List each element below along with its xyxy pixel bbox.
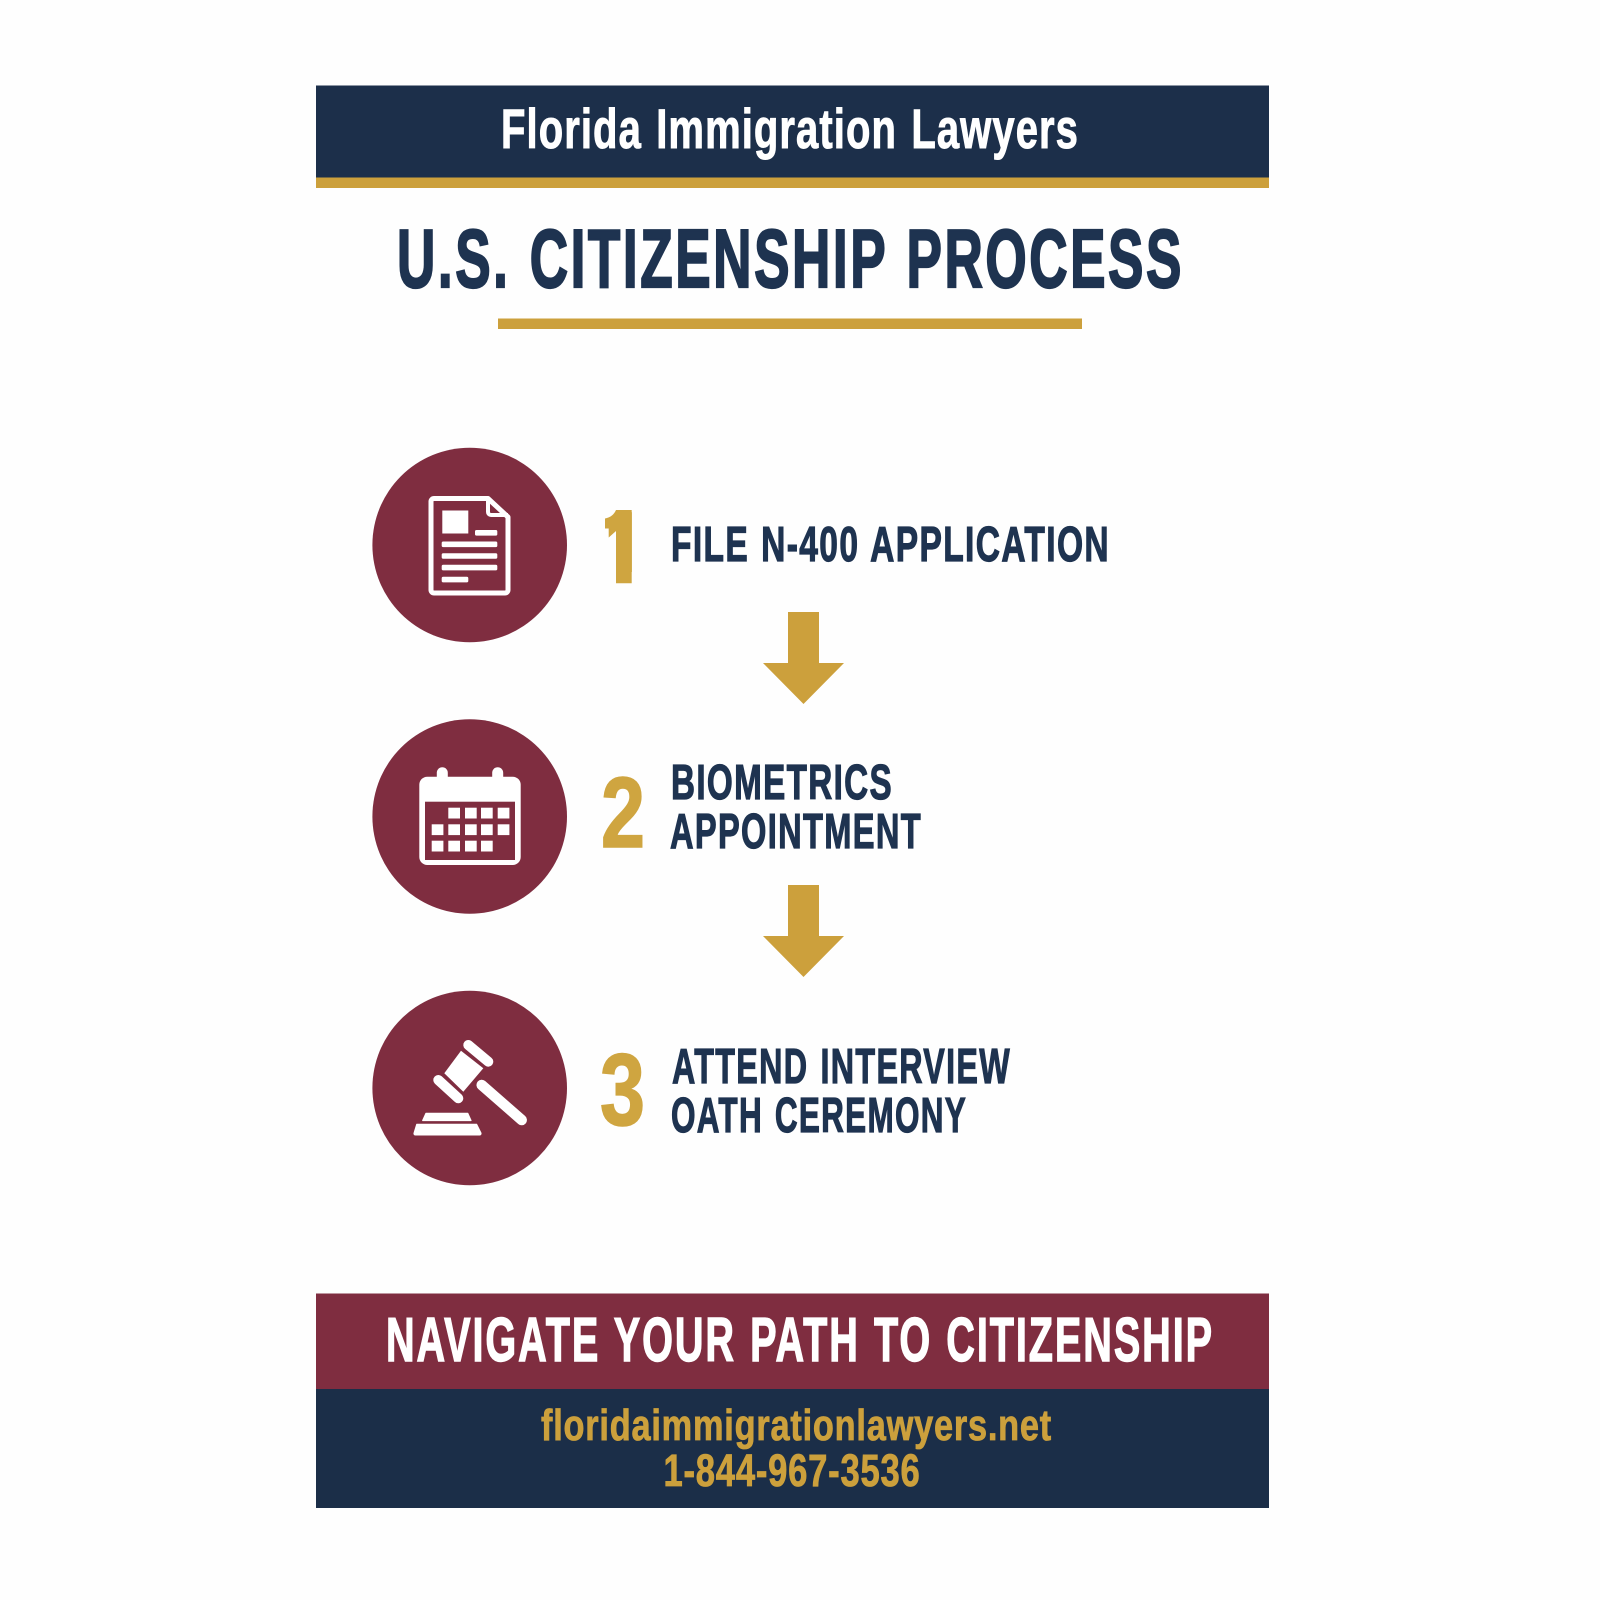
infographic <box>316 86 1269 1508</box>
icon: document <box>372 448 567 642</box>
number 1: 1 <box>604 491 644 605</box>
step 2 label: APPOINTMENT <box>670 804 922 859</box>
icon: gavel <box>372 991 567 1185</box>
number 2: 2 <box>601 757 645 869</box>
step 2 label: BIOMETRICS <box>671 755 893 810</box>
footer contact panel <box>316 1389 1269 1508</box>
step 1 label: FILE N-400 APPLICATION <box>671 517 1110 572</box>
firm name: Florida Immigration Lawyers <box>501 97 1079 160</box>
footer call to action banner <box>316 1294 1269 1389</box>
step 1 <box>372 448 1110 642</box>
phone number: 1-844-967-3536 <box>664 1445 920 1496</box>
step 3 label: ATTEND INTERVIEW <box>672 1039 1011 1094</box>
arrow 2 <box>763 885 844 977</box>
website: floridaimmigrationlawyers.net <box>541 1401 1052 1450</box>
arrow 1 <box>763 612 844 704</box>
header banner <box>316 86 1269 188</box>
step 2 label <box>670 755 922 859</box>
step 3 label: OATH CEREMONY <box>671 1088 967 1143</box>
step 3 label <box>671 1039 1011 1143</box>
step 2 <box>372 719 922 914</box>
title underline <box>498 318 1082 329</box>
title: U.S. CITIZENSHIP PROCESS <box>397 212 1184 305</box>
number 3: 3 <box>600 1033 645 1147</box>
number 1 <box>605 510 632 584</box>
icon: calendar <box>372 719 567 914</box>
step 3 <box>372 991 1011 1185</box>
